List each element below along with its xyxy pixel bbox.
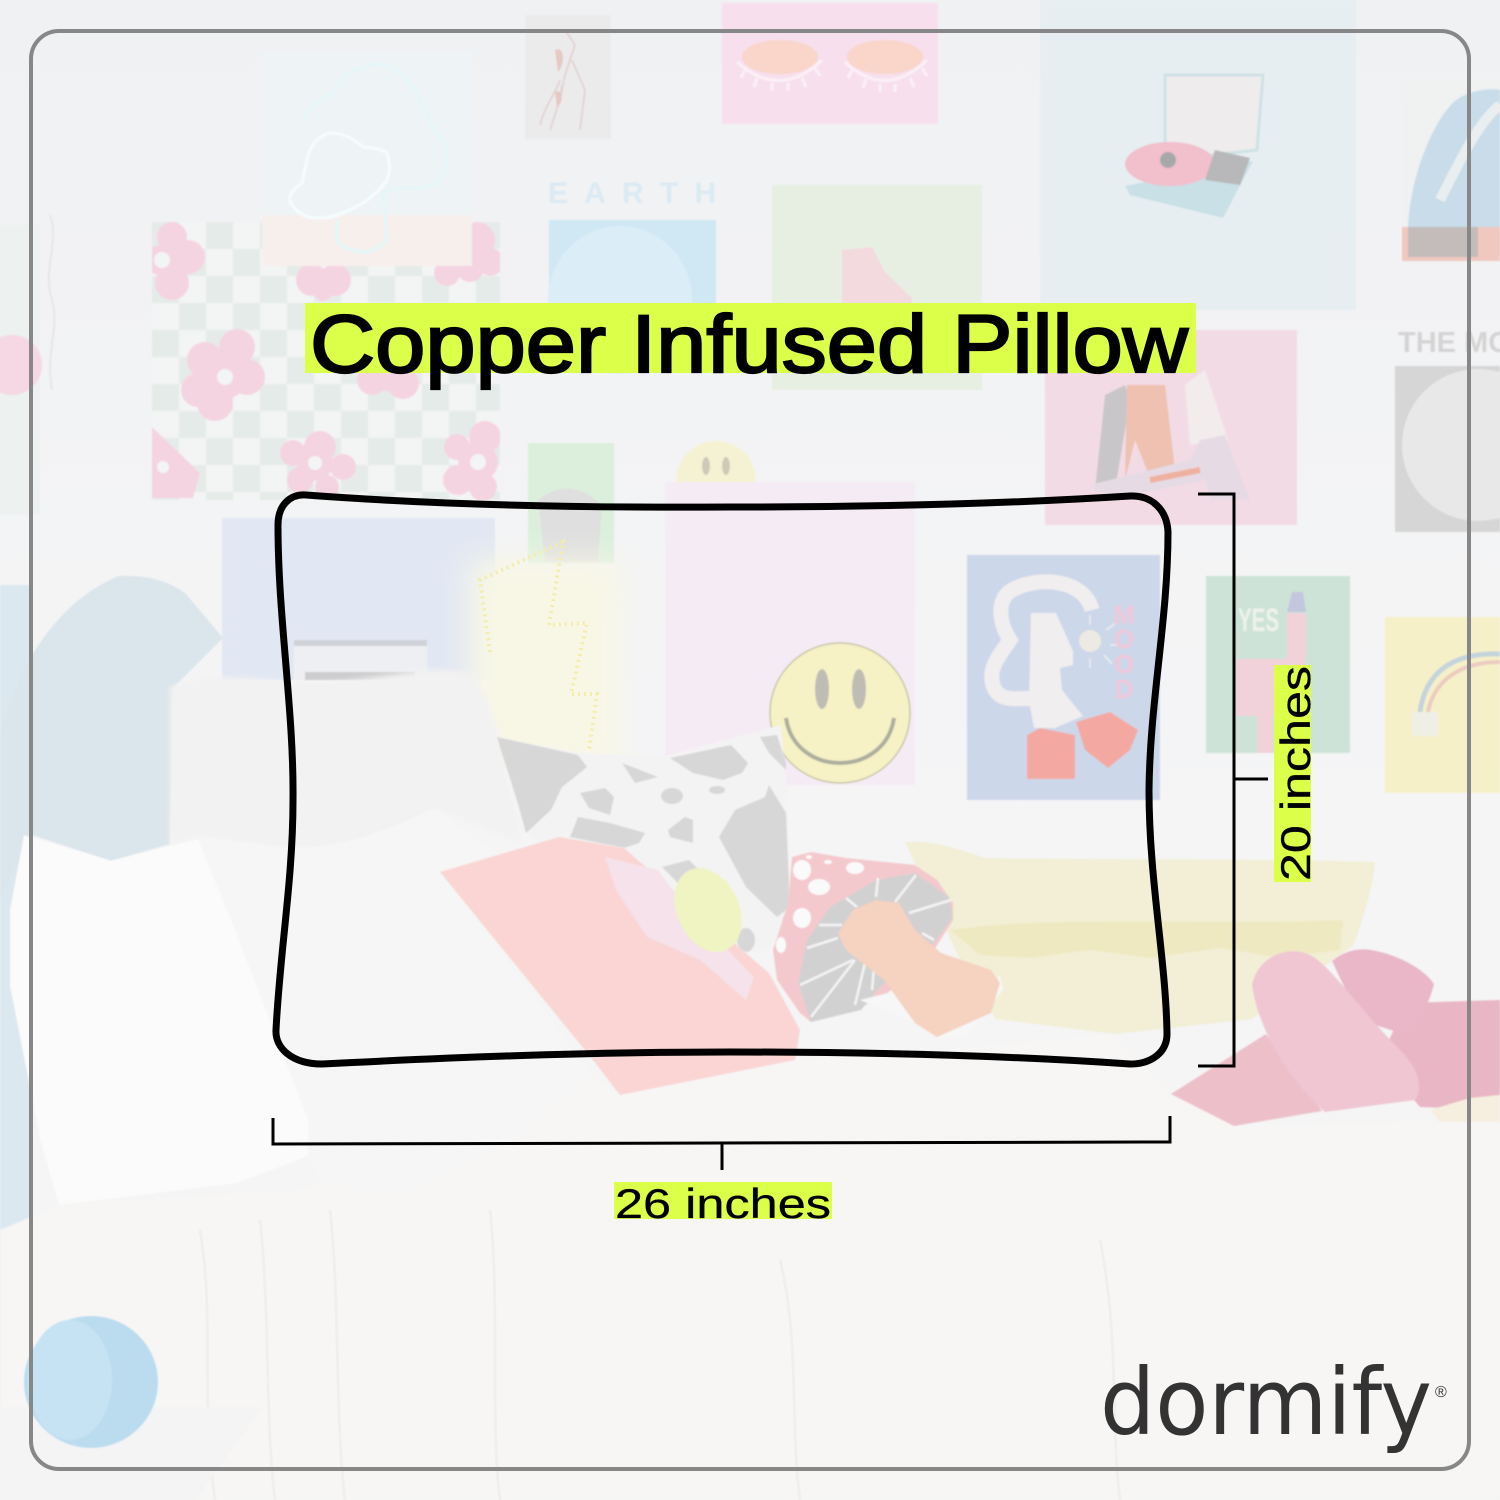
red pillows right [1171,949,1500,1126]
dormify logo: dormify [1100,1349,1432,1456]
blue headboard [0,576,223,1425]
fluffy white pillow [170,670,522,848]
poster: blue cassette [222,518,495,680]
poster: pink eyes [722,3,938,124]
width label: 26 inches [615,1180,831,1227]
poster: unicorn figure [525,15,611,139]
pink pillow with daisy [440,837,800,1095]
big smiley [770,643,910,783]
dormify logo: ® [1435,1384,1447,1401]
lightning string lights [470,542,620,770]
poster: neon mushroom [262,52,472,266]
poster: green roller skate [772,185,982,390]
daisy center [661,857,755,963]
daisy petals [605,857,754,1000]
poster: rainbow [1385,617,1500,793]
title highlight [305,303,1196,373]
poster: yes [1206,576,1350,753]
white nightstand [0,1407,263,1500]
poster: pale pink behind smiley [665,482,915,785]
poster: record player [1040,0,1356,310]
wall posters [0,0,1500,800]
poster: right blue shape [1402,80,1500,262]
height label: 20 inches [1272,666,1319,881]
yellow lumbar pillow with tassels [905,842,1375,1034]
blue round pillow [0,1316,263,1500]
mushroom pillow [773,852,1003,1037]
white bed blanket [0,1034,1500,1500]
MOOD letters: O [1114,624,1134,654]
MOOD letters [1113,600,1135,704]
left wall tapestry strip [0,215,54,515]
poster: small green [528,443,614,563]
MOOD letters: D [1115,674,1133,704]
poster: the moon [1395,327,1500,532]
wavy checker tapestry with flowers [145,222,504,501]
white bed pillows [10,808,593,1205]
poster: earth: EARTH [548,177,716,210]
poster: yes: YES [1238,602,1279,638]
mushroom stem [860,975,1003,1037]
small smiley [676,441,756,521]
poster: pink figures [1045,330,1297,525]
width dimension bracket [273,1116,1170,1170]
MOOD letters: M [1113,600,1135,630]
cow print pillow [497,725,790,960]
poster: earth [548,177,716,374]
pillow outline [276,495,1168,1064]
MOOD letters: O [1114,649,1134,679]
poster: mood cat [967,555,1160,800]
title: Copper Infused Pillow [310,299,1189,390]
height dimension bracket [1198,494,1268,1066]
